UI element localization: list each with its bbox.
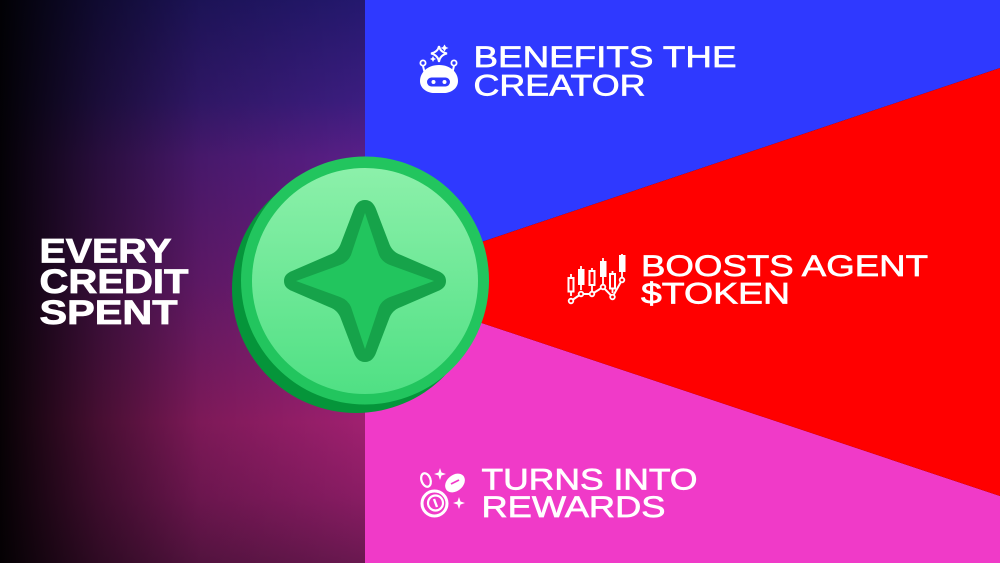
- heading: every credit spent: EVERY: [40, 232, 172, 270]
- icon: coins with sparkles: [419, 468, 469, 516]
- icon: robot with sparkles: [420, 44, 458, 93]
- heading: every credit spent: CREDIT: [40, 263, 189, 301]
- icon: candlestick chart: [568, 254, 626, 303]
- panel: red token wedge: [365, 68, 1000, 496]
- text: benefits the creator: [474, 41, 736, 102]
- text: benefits the creator: BENEFITS THE: [474, 41, 736, 74]
- text: benefits the creator: CREATOR: [474, 70, 646, 102]
- text: turns into rewards: [482, 464, 698, 524]
- panel: pink rewards background: [365, 284, 1000, 563]
- panel: left gradient background: [0, 0, 365, 563]
- text: turns into rewards: TURNS INTO: [482, 464, 698, 496]
- heading: every credit spent: SPENT: [40, 294, 178, 332]
- panel: blue benefits background: [365, 0, 1000, 281]
- heading: every credit spent: [40, 232, 189, 332]
- icon: green credit coin: [232, 156, 489, 413]
- text: boosts agent token: [641, 250, 928, 310]
- text: boosts agent token: BOOSTS AGENT: [641, 250, 928, 283]
- text: boosts agent token: $TOKEN: [641, 278, 790, 310]
- text: turns into rewards: REWARDS: [482, 491, 666, 524]
